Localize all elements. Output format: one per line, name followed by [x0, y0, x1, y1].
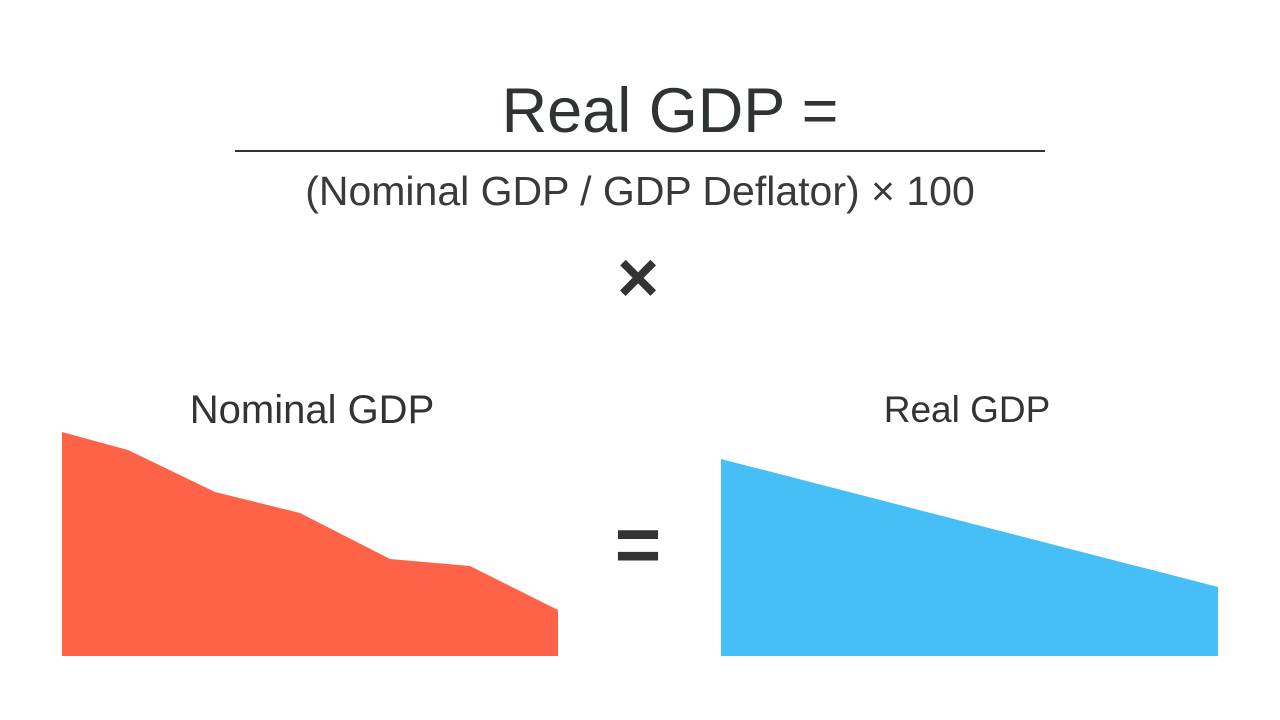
- formula denominator: (Nominal GDP / GDP Deflator) × 100: [305, 168, 975, 214]
- fraction line: [235, 150, 1045, 152]
- equals sign: =: [615, 500, 661, 589]
- title: Real GDP =: [502, 76, 838, 146]
- label: nominal GDP: Nominal GDP: [190, 388, 434, 432]
- multiplication sign: ×: [617, 238, 659, 318]
- label: real GDP: Real GDP: [884, 389, 1050, 430]
